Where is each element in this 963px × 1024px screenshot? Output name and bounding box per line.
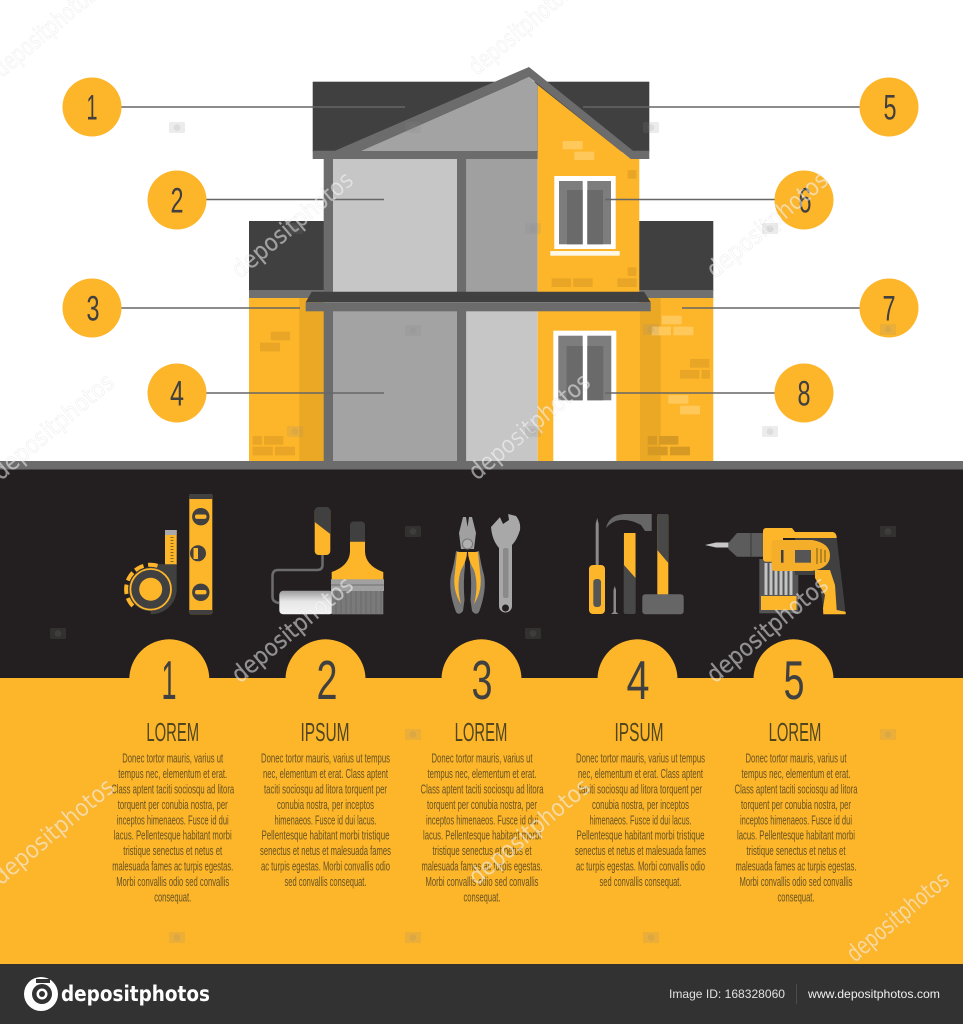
roller wire <box>272 555 322 603</box>
body text: tempus nec, elementum et erat. <box>428 766 536 781</box>
callout 5: 5 <box>884 88 896 128</box>
body text: Class aptent taciti sociosqu ad litora <box>111 781 235 796</box>
tape blade <box>165 530 177 565</box>
body text: sed convallis consequat. <box>284 874 366 889</box>
body text: malesuada fames ac turpis egestas. <box>422 859 542 874</box>
brush bristles <box>332 591 383 614</box>
back roof <box>313 82 649 152</box>
body text: Donec tortor mauris, varius ut <box>746 750 847 766</box>
body text: inceptos himenaeos. Fusce id dui <box>117 812 229 827</box>
panel: dark tools band <box>0 470 963 678</box>
callout 5 <box>860 78 918 136</box>
roller sleeve <box>279 591 333 614</box>
screwdriver <box>589 518 605 614</box>
body text: Pellentesque habitant morbi tristique <box>576 828 704 843</box>
pliers pivot <box>462 539 472 549</box>
house illustration <box>249 67 713 461</box>
pliers handles <box>450 551 485 614</box>
column 5 text <box>734 717 858 904</box>
step tab 1 <box>129 639 209 719</box>
callout 4: 4 <box>170 374 184 414</box>
body text: senectus et netus et malesuada fames <box>260 843 391 858</box>
body text: tristique senectus et netus et <box>432 843 532 858</box>
body text: consequat. <box>778 890 814 904</box>
right wing roof <box>639 221 713 291</box>
body text: lacus. Pellentesque habitant morbi <box>114 828 232 843</box>
body text: ac turpis egestas. Morbi convallis odio <box>261 859 390 874</box>
body text: conubia nostra, per inceptos <box>592 797 689 812</box>
icon: pliers and wrench <box>450 513 520 614</box>
footer logo icon <box>24 977 58 1011</box>
lower floor left room <box>333 311 457 461</box>
callout 2: 2 <box>170 182 184 220</box>
body text: tristique senectus et netus et <box>746 843 846 858</box>
column 3 text <box>420 717 544 904</box>
body text <box>111 750 235 904</box>
body text: Donec tortor mauris, varius ut tempus <box>576 750 705 766</box>
lower floor yellow wall <box>538 311 640 461</box>
body text: himenaeos. Fusce id dui lacus. <box>274 812 376 827</box>
body text: Morbi convallis odio sed convallis <box>740 874 853 889</box>
callout 6 <box>774 170 834 230</box>
body text <box>575 750 706 889</box>
panel: yellow text band <box>0 678 963 964</box>
hammer <box>606 514 652 614</box>
step tab 3: 3 <box>472 649 492 711</box>
body text: Morbi convallis odio sed convallis <box>116 874 229 889</box>
brush handle <box>350 522 365 542</box>
body text: Donec tortor mauris, varius ut <box>432 750 533 766</box>
watermark overlay: depositphotos <box>463 773 596 891</box>
body text: tempus nec, elementum et erat. <box>742 766 850 781</box>
heading: IPSUM <box>614 717 664 747</box>
body text: Donec tortor mauris, varius ut tempus <box>261 750 390 766</box>
roof gable trim <box>313 67 649 159</box>
roller handle <box>315 507 330 555</box>
step tab 3 <box>442 639 522 719</box>
body text <box>734 750 858 904</box>
drill bit case <box>759 559 798 613</box>
brush ferrule <box>331 579 384 591</box>
step tab 4: 4 <box>626 649 650 711</box>
watermark camera marks <box>50 122 896 943</box>
body text <box>260 750 391 889</box>
watermark overlay: depositphotos <box>701 166 834 284</box>
watermark overlay: depositphotos <box>463 368 596 486</box>
attic triangle <box>361 77 538 151</box>
right wing wall <box>639 290 713 461</box>
body text: inceptos himenaeos. Fusce id dui <box>740 812 852 827</box>
step tab 1: 1 <box>162 649 176 711</box>
icon: power drill <box>705 528 846 614</box>
footer logo wordmark: depositphotos <box>61 982 210 1006</box>
body text: lacus. Pellentesque habitant morbi <box>423 828 541 843</box>
callout 6: 6 <box>798 182 812 220</box>
floor slab <box>306 292 651 311</box>
callout 1: 1 <box>86 88 98 128</box>
callout 2 <box>148 170 206 230</box>
body text: nec, elementum et erat. Class aptent <box>263 766 388 781</box>
body text: taciti sociosqu ad litora torquent per <box>579 781 702 796</box>
mallet <box>642 514 684 614</box>
body text: malesuada fames ac turpis egestas. <box>736 859 856 874</box>
drill rear body <box>795 538 845 612</box>
lower floor right room <box>466 311 538 461</box>
body text: tempus nec, elementum et erat. <box>118 766 227 781</box>
callout 8: 8 <box>798 374 810 414</box>
icon: tape measure and spirit level <box>126 494 212 614</box>
icon: paint roller and brush <box>272 507 384 614</box>
upper floor yellow wall <box>538 85 639 292</box>
watermark overlay: depositphotos <box>226 166 359 284</box>
callout 7: 7 <box>882 290 896 328</box>
body text: torquent per conubia nostra, per <box>427 797 537 812</box>
brush body <box>332 542 383 580</box>
upper window <box>550 176 620 256</box>
tape housing <box>126 564 177 614</box>
body text: taciti sociosqu ad litora torquent per <box>264 781 387 796</box>
heading: IPSUM <box>300 717 350 747</box>
wrench <box>491 513 520 612</box>
callout 3: 3 <box>86 290 100 328</box>
body text: senectus et netus et malesuada fames <box>575 843 706 858</box>
body text: tristique senectus et netus et <box>123 843 222 858</box>
body text: ac turpis egestas. Morbi convallis odio <box>576 859 705 874</box>
body text: malesuada fames ac turpis egestas. <box>112 859 233 874</box>
drill housing <box>763 528 837 571</box>
body text: lacus. Pellentesque habitant morbi <box>737 828 855 843</box>
body text: Morbi convallis odio sed convallis <box>426 874 539 889</box>
footer divider <box>796 984 797 1004</box>
body text <box>420 750 544 904</box>
column 4 text <box>575 717 706 889</box>
nail <box>611 586 618 614</box>
drill bit <box>705 542 730 548</box>
ground strip <box>0 461 963 470</box>
heading: LOREM <box>146 717 199 747</box>
callout lines <box>120 107 862 393</box>
body text: nec, elementum et erat. Class aptent <box>578 766 703 781</box>
pliers head <box>459 517 476 549</box>
drill handle <box>815 570 846 614</box>
bricks <box>253 141 710 455</box>
body text: consequat. <box>154 890 191 904</box>
body text: Class aptent taciti sociosqu ad litora <box>734 781 858 796</box>
step tab 2: 2 <box>316 649 338 711</box>
spirit level <box>189 494 212 614</box>
callout 8 <box>774 364 834 422</box>
step tab 5: 5 <box>784 649 804 711</box>
panel: house section background <box>0 0 963 461</box>
wall posts <box>324 159 466 461</box>
column 2 text <box>260 717 391 889</box>
callout 3 <box>62 278 122 338</box>
step tab 4 <box>598 639 678 719</box>
body text: sed convallis consequat. <box>600 874 682 889</box>
column 1 text <box>111 717 235 904</box>
footer url: www.depositphotos.com <box>807 987 940 1001</box>
door <box>553 331 616 461</box>
body text: himenaeos. Fusce id dui lacus. <box>590 812 692 827</box>
callout 4 <box>148 364 206 422</box>
left wing roof <box>249 221 324 291</box>
image id: Image ID: 168328060 <box>669 987 785 1001</box>
body text: conubia nostra, per inceptos <box>277 797 374 812</box>
callout 7 <box>860 278 918 338</box>
upper floor left room <box>333 159 457 292</box>
body text: Class aptent taciti sociosqu ad litora <box>420 781 544 796</box>
heading: LOREM <box>769 717 821 747</box>
watermark overlay: depositphotos <box>701 571 834 689</box>
callout 1 <box>62 78 122 136</box>
footer bar <box>0 964 963 1024</box>
step tab 2 <box>286 639 366 719</box>
body text: torquent per conubia nostra, per <box>741 797 851 812</box>
chuck <box>728 533 763 557</box>
upper floor right room <box>466 159 538 292</box>
body text: Pellentesque habitant morbi tristique <box>262 828 390 843</box>
watermark overlay: depositphotos <box>226 571 359 689</box>
body text: inceptos himenaeos. Fusce id dui <box>426 812 538 827</box>
step tab 5 <box>754 639 834 719</box>
icon: screwdriver, nail, hammer and mallet <box>589 514 684 614</box>
body text: torquent per conubia nostra, per <box>118 797 228 812</box>
left wing wall <box>249 290 324 461</box>
heading: LOREM <box>455 717 507 747</box>
body text: consequat. <box>464 890 500 904</box>
body text: Donec tortor mauris, varius ut <box>122 750 223 766</box>
